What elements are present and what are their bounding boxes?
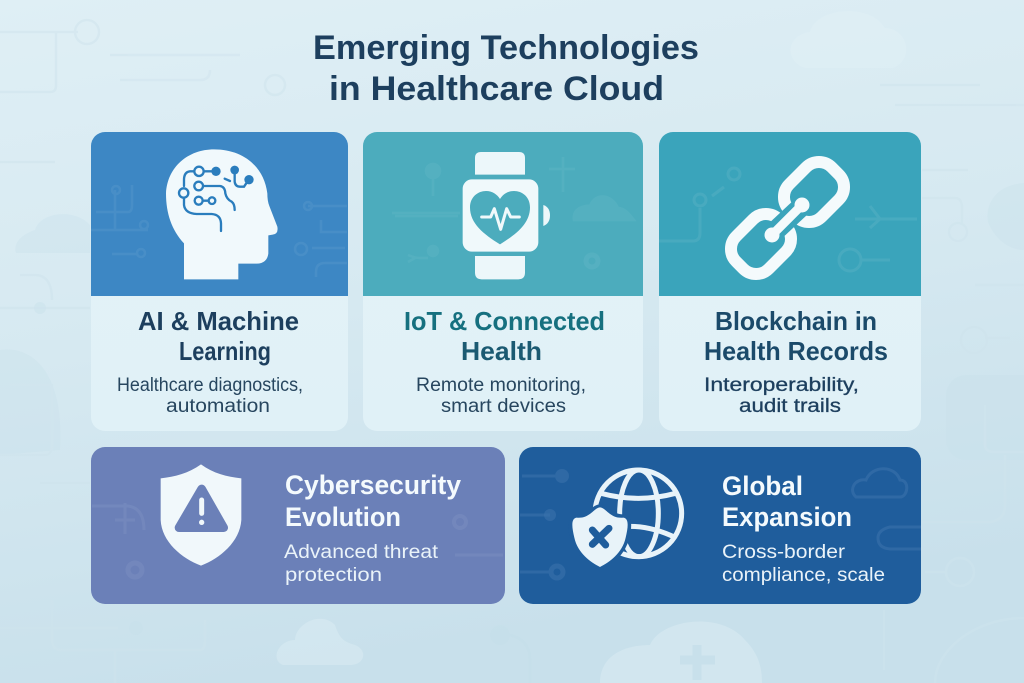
heading: AI and machine learning: Learning xyxy=(179,336,271,366)
heading: global expansion: Global xyxy=(722,471,803,501)
heading: cybersecurity evolution: Cybersecurity xyxy=(285,470,461,500)
text: cybersecurity description xyxy=(284,542,439,586)
title: in Healthcare Cloud xyxy=(329,70,664,108)
text: blockchain description xyxy=(704,375,859,417)
heading: global expansion: Expansion xyxy=(722,502,852,532)
text: IoT description: Remote monitoring, xyxy=(416,375,586,396)
text: AI description: automation xyxy=(166,396,270,417)
text: global description: Cross-border xyxy=(722,542,846,563)
heading: IoT and connected health: IoT & Connected xyxy=(404,306,605,336)
text: AI description xyxy=(117,375,303,417)
panel: AI and machine learning xyxy=(91,132,348,431)
icon: chain links xyxy=(724,155,851,281)
icon: globe with shield xyxy=(571,470,682,568)
title: Emerging Technologies xyxy=(313,29,699,67)
heading: cybersecurity evolution: Evolution xyxy=(285,502,401,532)
text: AI description: Healthcare diagnostics, xyxy=(117,375,303,396)
text: blockchain description: Interoperability, xyxy=(704,375,859,396)
title xyxy=(313,29,699,108)
heading: cybersecurity evolution xyxy=(285,470,461,532)
heading: blockchain in health records xyxy=(704,306,888,366)
panel: IoT and connected health xyxy=(363,132,643,431)
heading: AI and machine learning: AI & Machine xyxy=(138,306,299,336)
heading: blockchain in health records: Health Records xyxy=(704,336,888,366)
heading: blockchain in health records: Blockchain in xyxy=(715,306,877,336)
text: blockchain description: audit trails xyxy=(739,396,841,417)
text: global description: compliance, scale xyxy=(722,565,885,586)
heading: IoT and connected health xyxy=(404,306,605,366)
text: cybersecurity description: protection xyxy=(285,565,382,586)
icon: head with circuits xyxy=(166,149,278,279)
heading: IoT and connected health: Health xyxy=(461,336,542,366)
icon: smartwatch with heart xyxy=(463,152,550,279)
text: IoT description xyxy=(416,375,586,417)
text: global description xyxy=(722,542,885,586)
panel: blockchain in health records xyxy=(659,132,921,431)
heading: global expansion xyxy=(722,471,852,532)
panel: cybersecurity evolution xyxy=(91,447,505,604)
heading: AI and machine learning xyxy=(138,306,299,366)
icon: warning shield xyxy=(161,464,241,566)
panel: global expansion xyxy=(519,447,921,604)
text: IoT description: smart devices xyxy=(441,396,566,417)
text: cybersecurity description: Advanced threat xyxy=(284,542,439,563)
